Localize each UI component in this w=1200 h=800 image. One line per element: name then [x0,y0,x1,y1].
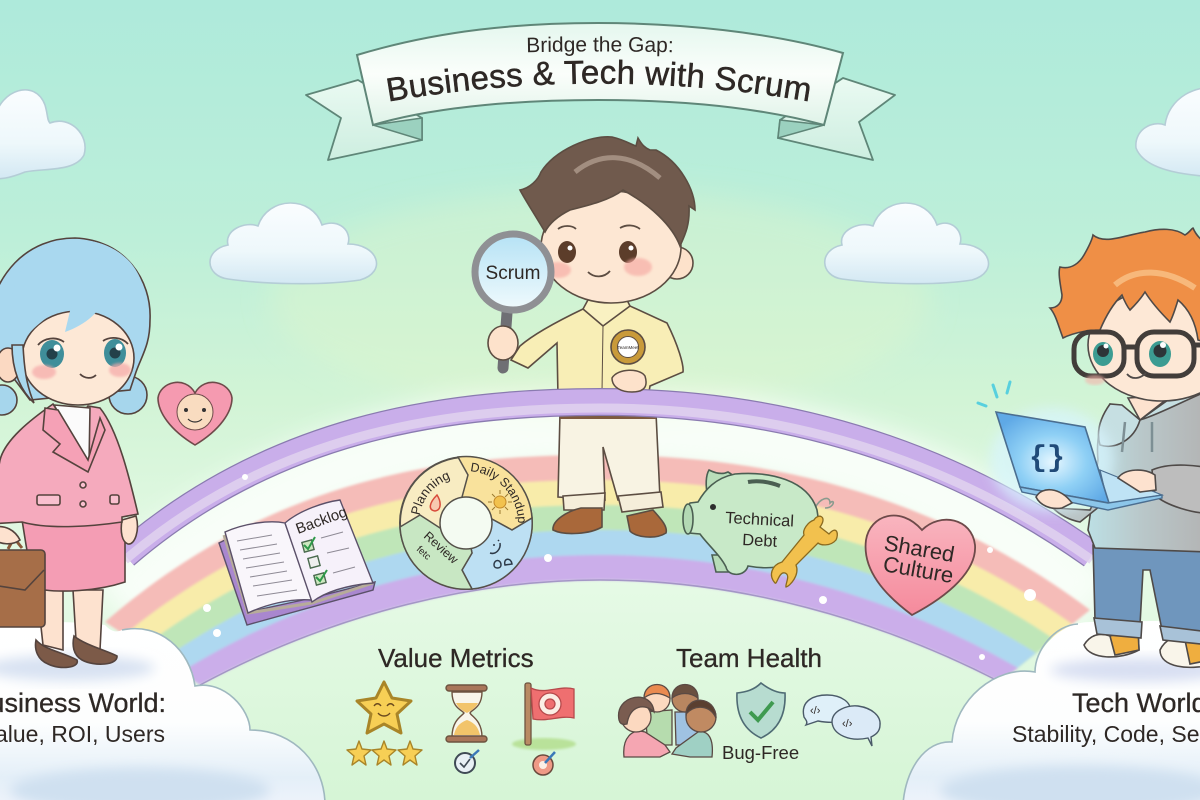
banner folds [373,118,824,140]
icon: code chat bubbles: ‹/› [810,705,821,717]
laptop screen [996,412,1109,503]
wrench [771,516,837,587]
buttons and pockets [37,482,119,507]
soft glow around the bridge [120,190,1090,610]
icon: smiling star [347,682,422,765]
braces: {} [1029,442,1065,476]
culture label: Culture [881,551,955,588]
checkboxes [302,537,327,585]
eye [710,504,716,510]
sun icon [488,490,512,514]
scrum cycle wheel [399,456,533,590]
mouth [1127,373,1146,378]
base cloud right [903,620,1200,800]
team health heading: Team Health [676,643,822,673]
eyes [1093,341,1171,367]
laptop glow [990,408,1114,512]
ears [661,247,693,279]
title: Business & Tech with Scrum [387,60,810,102]
rainbow bridge [105,455,1090,685]
icon: bug-free shield [722,683,799,763]
icon: code chat bubbles: ‹/› [842,718,853,730]
tech world label [1012,688,1200,747]
tail [815,498,833,508]
ear [0,348,20,382]
blouse [54,405,90,465]
magnifying glass: Scrum [486,263,540,284]
hand right [121,516,137,544]
right teammate [672,732,712,757]
jacket [0,404,138,527]
backlog book [219,500,375,625]
value metrics heading: Value Metrics [378,643,534,673]
shoe right [627,510,666,537]
neck [1128,395,1172,420]
banner [305,22,896,161]
small stars [347,741,422,765]
daily standup segment [458,456,532,530]
legs [37,590,103,650]
bug-free label: Bug-Free [722,742,799,763]
laptop base [1020,487,1162,510]
snout [683,504,693,534]
target with arrow [455,750,479,773]
glasses [1074,332,1200,376]
heart with smiley [158,382,232,445]
hand with magnifier [488,326,518,360]
flame icon [430,495,440,511]
right page [285,500,373,602]
belt [560,410,656,419]
sprint segment [462,518,532,589]
brows and mouth [558,225,640,276]
sparks [978,382,1010,406]
character: Scrum master upper body and head [475,137,695,398]
review note: fetc [414,544,433,563]
hands [1036,470,1156,508]
shoes [36,636,117,667]
review label: Review [421,529,462,567]
head [541,191,681,303]
hub [440,497,492,549]
shirt [511,306,683,398]
character: business girl [0,238,150,667]
cloud: top left [0,90,85,179]
cheeks [545,258,652,278]
face [1088,289,1200,401]
target with arrow [533,752,555,775]
debt label: Debt [742,531,778,551]
shared label: Shared [882,530,956,567]
magnifying glass [475,234,551,310]
back leg [712,555,730,572]
hoodie arm [1152,465,1200,513]
book cover [219,540,375,625]
hair back [0,238,150,400]
hood strings [1122,422,1152,452]
coin slot [748,481,780,486]
icon: code chat bubbles [803,695,880,746]
banner main [357,23,843,125]
cloud: top right [1136,87,1200,178]
sparkles on rainbow [203,547,1036,660]
planning label: Planning [411,472,450,514]
business world label [0,688,166,747]
doodle icon [494,559,512,568]
left teammate [624,731,670,757]
cloud: mid right [825,203,989,284]
standup label: Daily Standup [471,462,525,523]
shared culture heart [866,516,975,615]
icon: goal flag [512,683,576,775]
base cloud left [0,622,325,800]
briefcase [0,538,45,627]
page lines [237,532,355,596]
skirt [22,520,125,591]
ear [706,470,741,498]
banner left tail [306,80,422,160]
cheeks [1085,375,1105,385]
hair [520,137,695,246]
smile icon [490,540,500,553]
hand on the rail [612,370,646,392]
eyes [40,339,126,368]
icon: hourglass [446,685,487,773]
magnifier handle [503,313,507,368]
shoes [1084,628,1139,657]
eyes [558,241,637,263]
lapels [43,408,105,472]
left page [225,522,312,613]
review segment [400,515,472,589]
bangs [10,240,146,370]
body [685,473,818,574]
hood [1098,390,1200,446]
backlog label: Backlog [294,504,350,538]
character: tech boy [978,228,1200,667]
hoodie [1088,390,1200,552]
piggy bank [683,470,833,574]
icon: team handshake [619,684,716,757]
character: Scrum master lower body [553,410,666,537]
lashes and mouth [38,338,128,378]
banner right tail [778,78,895,160]
technical label: Technical [725,509,794,531]
bridge rail [125,402,1092,560]
hand on briefcase [0,527,20,544]
subtitle: Bridge the Gap: [528,36,672,56]
shoe left [553,508,602,534]
cheeks [32,363,131,379]
cloud: mid left [210,203,377,284]
laptop keyboard [1100,470,1162,504]
badge [611,330,645,364]
face [22,311,134,405]
outer disc [400,457,532,589]
badge: TeamMeet [617,345,639,350]
pigtails [109,376,147,414]
hair [1050,228,1200,345]
jeans [1093,545,1200,635]
